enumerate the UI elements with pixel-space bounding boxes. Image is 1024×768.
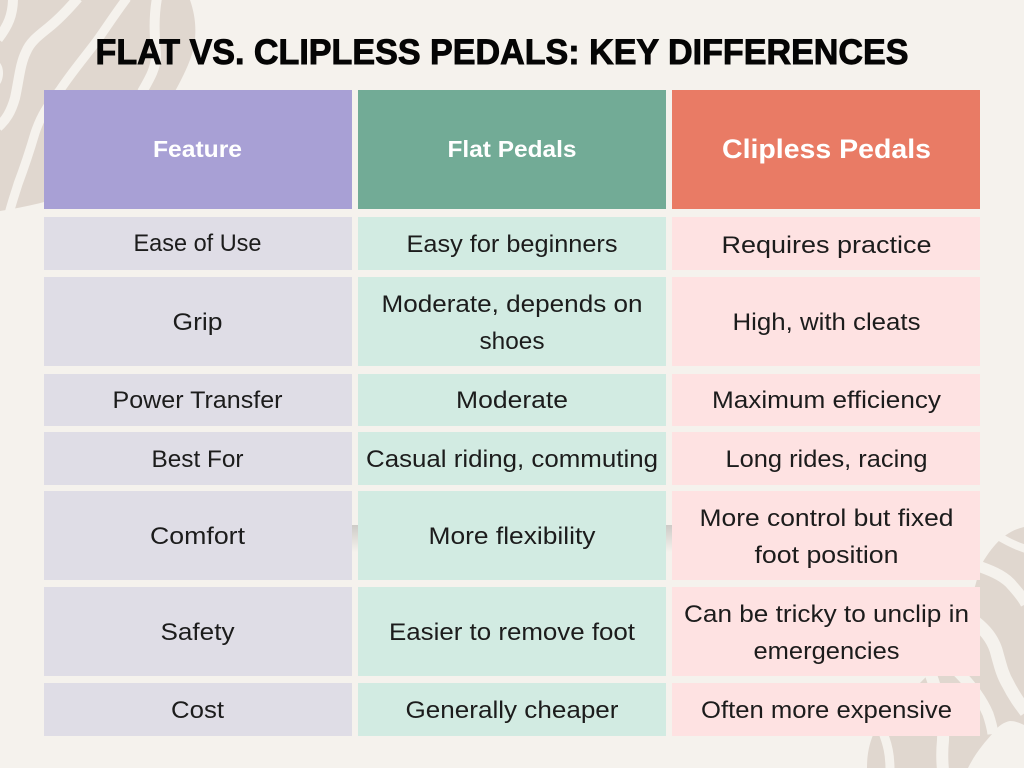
cell: Requires practice xyxy=(672,217,980,270)
cell: Generally cheaper: Generally cheaper xyxy=(406,697,618,724)
cell: Easy for beginners: Easy for beginners xyxy=(406,231,618,258)
cell: Long rides, racing: Long rides, racing xyxy=(726,446,928,473)
cell: Moderate xyxy=(358,374,666,426)
cell: Maximum efficiency xyxy=(672,374,980,426)
decorative blob: bottom right xyxy=(867,527,1024,768)
cell: Can be tricky to unclip in emergencies xyxy=(672,587,980,676)
row label: Ease of Use xyxy=(44,217,352,270)
row label: Safety xyxy=(44,587,352,676)
row label: Safety: Safety xyxy=(160,619,234,646)
cell: Moderate, depends on shoes: Moderate, depends on xyxy=(382,291,642,318)
header: Feature: Feature xyxy=(153,136,242,162)
title: FLAT VS. CLIPLESS PEDALS: KEY DIFFERENCES xyxy=(96,33,908,72)
row label: Cost xyxy=(44,683,352,736)
header: Clipless Pedals: Clipless Pedals xyxy=(722,134,931,164)
row label: Power Transfer xyxy=(44,374,352,426)
row label: Power Transfer: Power Transfer xyxy=(112,387,282,414)
cell: Requires practice: Requires practice xyxy=(722,232,932,259)
row label: Ease of Use: Ease of Use xyxy=(134,230,262,257)
cell: Casual riding, commuting: Casual riding, commuting xyxy=(366,446,658,473)
cell: Often more expensive xyxy=(672,683,980,736)
row label: Comfort: Comfort xyxy=(150,523,245,550)
cell: More flexibility: More flexibility xyxy=(428,523,596,550)
cell: Moderate, depends on shoes: shoes xyxy=(480,328,544,355)
cell: More flexibility xyxy=(358,491,666,580)
cell: Maximum efficiency: Maximum efficiency xyxy=(712,387,941,414)
header: Clipless Pedals xyxy=(672,90,980,209)
column: Flat Pedals xyxy=(358,90,666,736)
header: Flat Pedals xyxy=(358,90,666,209)
header: Feature xyxy=(44,90,352,209)
cell: Moderate, depends on shoes xyxy=(358,277,666,366)
cell: Long rides, racing xyxy=(672,432,980,485)
row label: Best For: Best For xyxy=(152,446,244,473)
column: Clipless Pedals xyxy=(672,90,980,736)
cell: Generally cheaper xyxy=(358,683,666,736)
row label: Grip xyxy=(44,277,352,366)
cell: Casual riding, commuting xyxy=(358,432,666,485)
row label: Cost: Cost xyxy=(171,697,224,724)
header: Flat Pedals: Flat Pedals xyxy=(448,136,576,162)
cell: Often more expensive: Often more expensive xyxy=(701,697,952,724)
cell: Can be tricky to unclip in emergencies: emergencies xyxy=(754,638,900,665)
cell: Moderate: Moderate xyxy=(456,387,568,414)
cell: Can be tricky to unclip in emergencies: Can be tricky to unclip in xyxy=(684,601,969,628)
column: Feature xyxy=(44,90,352,736)
cell: Easier to remove foot xyxy=(358,587,666,676)
row label: Comfort xyxy=(44,491,352,580)
cell: High, with cleats xyxy=(672,277,980,366)
row label: Grip: Grip xyxy=(172,309,222,336)
column gap shadows xyxy=(352,525,672,552)
cell: Easier to remove foot: Easier to remove foot xyxy=(389,619,635,646)
cell: More control but fixed foot position: foot position xyxy=(754,542,898,569)
row label: Best For xyxy=(44,432,352,485)
cell: More control but fixed foot position xyxy=(672,491,980,580)
cell: More control but fixed foot position: More control but fixed xyxy=(700,505,954,532)
cell: Easy for beginners xyxy=(358,217,666,270)
decorative blob: top left xyxy=(0,0,195,214)
cell: High, with cleats: High, with cleats xyxy=(732,309,920,336)
